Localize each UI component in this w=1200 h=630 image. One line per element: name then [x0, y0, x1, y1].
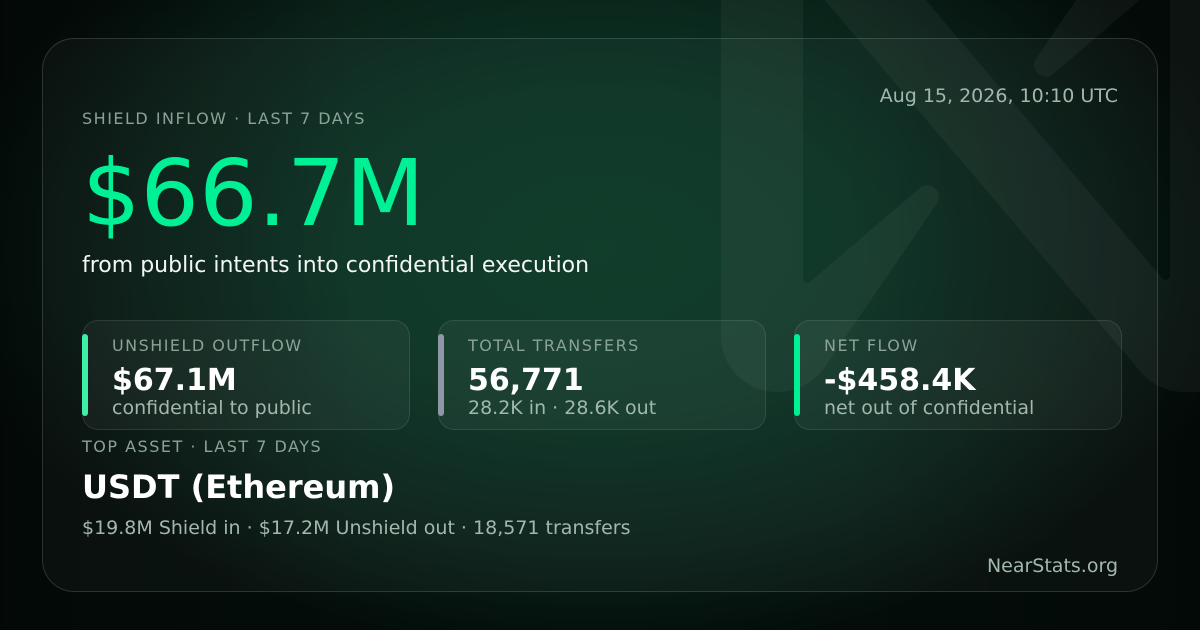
footer brand: NearStats.org — [987, 555, 1118, 577]
stat value: -$458.4K — [824, 363, 975, 398]
stat label: TOTAL TRANSFERS — [468, 336, 640, 355]
accent bar — [438, 334, 444, 416]
top asset details: $19.8M Shield in · $17.2M Unshield out · 18,571 transfers — [82, 517, 630, 539]
stat note: confidential to public — [112, 397, 312, 419]
stat note: net out of confidential — [824, 397, 1034, 419]
stat label: NET FLOW — [824, 336, 919, 355]
panel: unshield outflow — [82, 320, 410, 430]
headline value: $66.7M — [82, 140, 425, 247]
panel: net flow — [794, 320, 1122, 430]
stat value: $67.1M — [112, 363, 237, 398]
stat label: UNSHIELD OUTFLOW — [112, 336, 303, 355]
headline subtitle: from public intents into confidential execution — [82, 253, 589, 278]
accent bar — [794, 334, 800, 416]
top asset name: USDT (Ethereum) — [82, 468, 395, 506]
stat value: 56,771 — [468, 363, 584, 398]
timestamp: Aug 15, 2026, 10:10 UTC — [880, 85, 1118, 107]
accent bar — [82, 334, 88, 416]
panel: total transfers — [438, 320, 766, 430]
stat note: 28.2K in · 28.6K out — [468, 397, 656, 419]
heading: top asset label: TOP ASSET · LAST 7 DAYS — [82, 437, 322, 456]
heading: shield inflow label: SHIELD INFLOW · LAST 7 DAYS — [82, 109, 366, 128]
